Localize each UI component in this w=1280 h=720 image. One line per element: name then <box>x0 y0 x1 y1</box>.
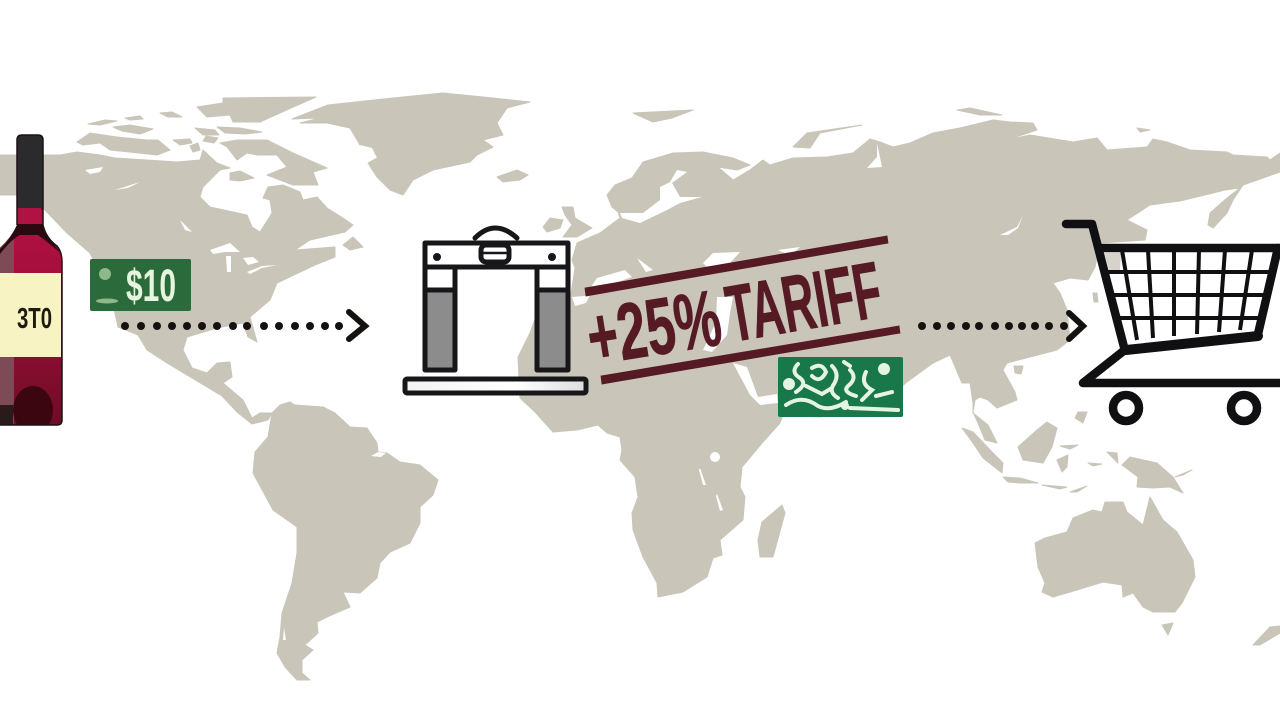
price tag: $10 <box>90 259 191 311</box>
North America <box>0 150 353 424</box>
price tag: $10: $10 <box>126 260 176 311</box>
gate top beam <box>425 243 568 267</box>
New Zealand <box>1253 626 1280 645</box>
icon: customs gate <box>405 228 586 393</box>
icon: shopping cart <box>1066 224 1280 421</box>
stamp: +25% tariff: +25% <box>581 273 727 382</box>
dotted arrow: customs to cart <box>918 313 1083 339</box>
Arctic Eurasian islands <box>633 110 693 122</box>
cart frame <box>1066 224 1280 383</box>
cart wheels <box>1113 395 1257 421</box>
Newfoundland <box>343 237 363 250</box>
Iceland <box>497 170 528 182</box>
stamp: +25% tariff <box>581 236 900 384</box>
cart grid <box>1106 250 1275 340</box>
Australia <box>1035 497 1195 612</box>
Southeast Asia islands <box>1018 422 1057 463</box>
stamp: +25% tariff: TARIFF <box>720 245 888 359</box>
wine bottle <box>0 130 67 434</box>
gate handle and clasp <box>475 228 517 262</box>
Arctic islands <box>220 140 327 185</box>
cart basket <box>1100 248 1280 347</box>
gate left pillar <box>425 267 455 370</box>
gate right pillar <box>537 267 568 370</box>
British Isles <box>543 218 563 232</box>
Madagascar <box>758 505 785 557</box>
dotted arrow: bottle to customs <box>121 312 365 339</box>
gate base <box>405 379 586 393</box>
Eurasia and Africa <box>518 120 1280 597</box>
seas and lakes <box>85 143 1023 640</box>
Greenland <box>292 93 530 195</box>
South America <box>253 402 438 680</box>
bottle label text: 3T0 <box>17 303 52 335</box>
banknote: garbled green tag <box>778 357 903 417</box>
